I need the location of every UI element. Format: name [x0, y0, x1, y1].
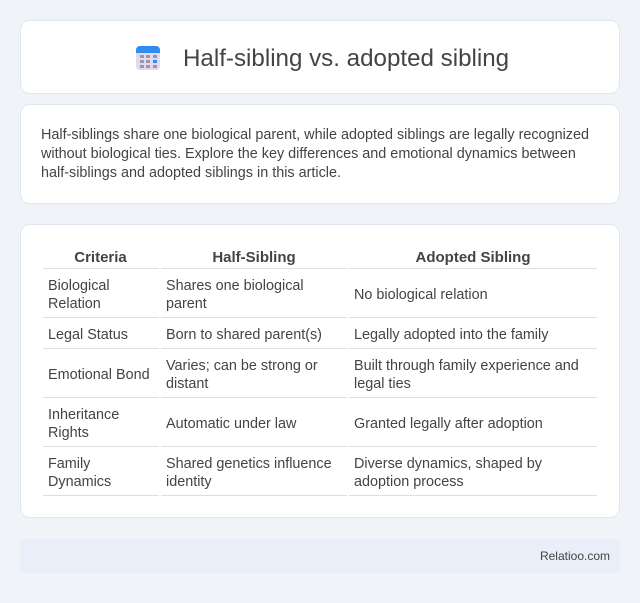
- icon: calendar: [136, 46, 160, 70]
- intro text: [41, 127, 589, 181]
- row: Inheritance Rights: Inheritance: [48, 407, 119, 423]
- text: legal ties: [354, 376, 411, 392]
- row: Inheritance Rights: [48, 407, 119, 441]
- intro text: without biological ties. Explore the key differences and emotional dynamics between: [41, 146, 576, 162]
- footer text: Relatioo.com: [540, 549, 610, 563]
- text: parent: [166, 296, 207, 312]
- text: identity: [166, 474, 212, 490]
- row: Legal Status: Legal Status: [48, 327, 128, 343]
- header: Half-Sibling: Half-Sibling: [212, 249, 296, 266]
- text: Automatic under law: [166, 416, 296, 432]
- text: Granted legally after adoption: [354, 416, 543, 432]
- text: Diverse dynamics, shaped by: [354, 456, 542, 472]
- text: Varies; can be strong or: [166, 358, 318, 374]
- row: Inheritance Rights: Rights: [48, 425, 89, 441]
- row: Family Dynamics: [48, 456, 111, 490]
- text: Legally adopted into the family: [354, 327, 548, 343]
- intro text: half-siblings and adopted siblings in this article.: [41, 165, 341, 181]
- text: No biological relation: [354, 287, 488, 303]
- table: [43, 249, 597, 496]
- intro text: Half-siblings share one biological parent, while adopted siblings are legally recognized: [41, 127, 589, 143]
- text: Born to shared parent(s): [166, 327, 322, 343]
- text: Shared genetics influence: [166, 456, 332, 472]
- row: Biological Relation: Relation: [48, 296, 101, 312]
- text: distant: [166, 376, 208, 392]
- text: adoption process: [354, 474, 464, 490]
- panel: title: [20, 20, 620, 94]
- text: Shares one biological: [166, 278, 304, 294]
- title text: Half-sibling vs. adopted sibling: [183, 45, 509, 72]
- row: Family Dynamics: Dynamics: [48, 474, 111, 490]
- text: Built through family experience and: [354, 358, 579, 374]
- panel: comparison table: [20, 224, 620, 518]
- footer bar: [20, 539, 620, 573]
- header: Adopted Sibling: Adopted Sibling: [416, 249, 530, 266]
- row: Biological Relation: [48, 278, 110, 312]
- panel: introduction: [20, 104, 620, 204]
- row: Emotional Bond: Emotional Bond: [48, 367, 150, 383]
- header: Criteria: Criteria: [74, 249, 127, 266]
- row: Biological Relation: Biological: [48, 278, 110, 294]
- row: Family Dynamics: Family: [48, 456, 90, 472]
